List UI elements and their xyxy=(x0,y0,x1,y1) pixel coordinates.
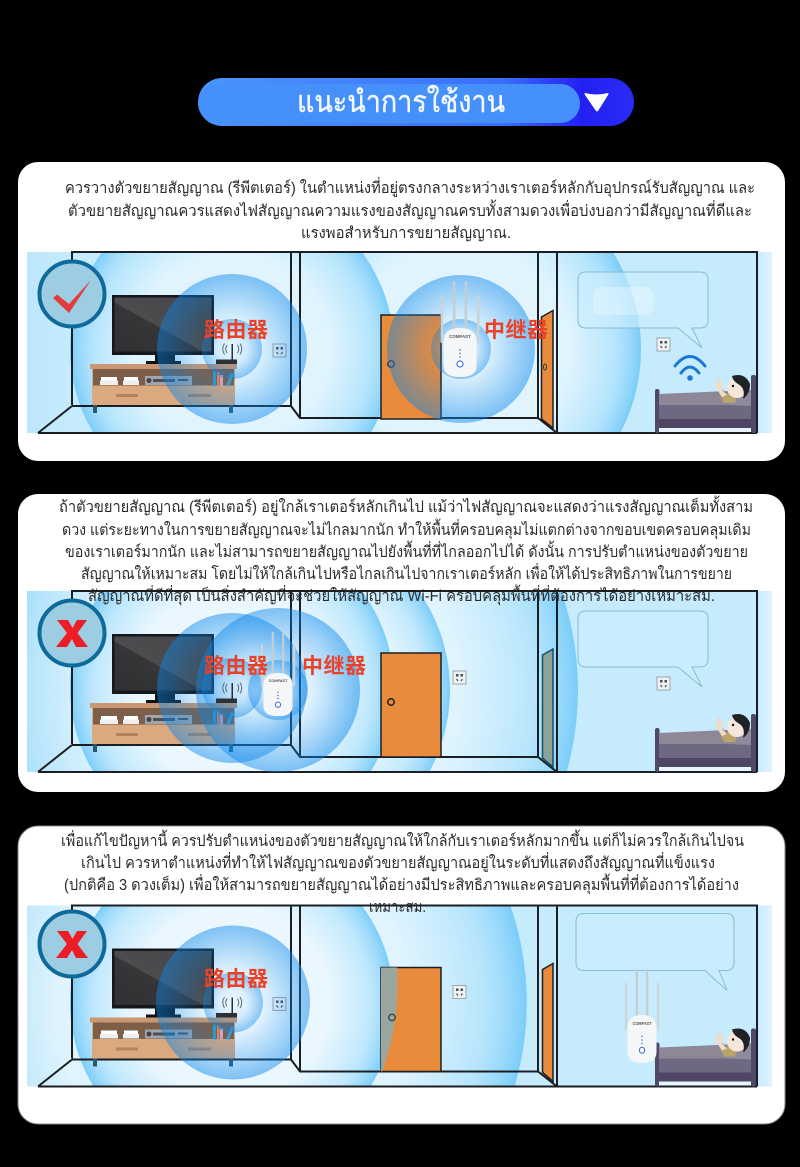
panel: too close to router xyxy=(18,494,785,792)
instruction text xyxy=(59,495,753,606)
router and repeater signal circles xyxy=(157,608,360,772)
label: router: 路由器 xyxy=(204,968,268,991)
instruction text: แรงพอสำหรับการขยายสัญญาณ. xyxy=(301,225,511,242)
icon: wifi xyxy=(675,356,705,381)
repeater device xyxy=(440,281,480,377)
icon: router device xyxy=(216,682,242,703)
instruction text xyxy=(61,829,744,916)
scene background and coverage xyxy=(27,591,772,772)
instruction text: เหมาะสม. xyxy=(369,899,426,916)
icon: router device xyxy=(216,344,242,364)
badge: cross xyxy=(40,912,104,976)
instruction text: (ปกติคือ 3 ดวงเต็ม) เพื่อให้สามารถขยายสัญญาณได้อย่างมีประสิทธิภาพและครอบคลุมพื้นที่ที่ต้องการได้อย่าง xyxy=(64,873,739,895)
label: router: 路由器 xyxy=(204,319,268,342)
icon: router device xyxy=(216,997,242,1018)
instruction text: สัญญาณที่ดีที่สุด เป็นสิ่งสำคัญที่จะช่วยให้สัญญาณ Wi-Fi ครอบคลุมพื้นที่ที่ต้องการได้อย่างเหมาะสม. xyxy=(88,584,715,606)
room scene xyxy=(38,252,757,433)
scene background and coverage xyxy=(27,906,772,1086)
room scene xyxy=(38,906,757,1086)
instruction text: ถ้าตัวขยายสัญญาณ (รีพีตเตอร์) อยู่ใกล้เราเตอร์หลักเกินไป แม้ว่าไฟสัญญาณจะแสดงว่าแรงสัญญาณเต็มทั้งสาม xyxy=(59,495,753,517)
instruction text: ตัวขยายสัญญาณควรแสดงไฟสัญญาณความแรงของสัญญาณครบทั้งสามดวงเพื่อบ่งบอกว่ามีสัญญาณที่ดีและ xyxy=(68,199,752,220)
instruction text: ดวง แต่ระยะทางในการขยายสัญญาณจะไม่ไกลมากนัก ทำให้พื้นที่ครอบคลุมไม่แตกต่างจากขอบเขตครอบคลุมเดิม xyxy=(62,518,751,540)
repeater device xyxy=(261,632,295,716)
instruction text: ควรวางตัวขยายสัญญาณ (รีพีตเตอร์) ในตำแหน่งที่อยู่ตรงกลางระหว่างเราเตอร์หลักกับอุปกรณ์รับสัญญาณ และ xyxy=(65,177,755,198)
label: router: 路由器 xyxy=(204,655,268,678)
icon: down arrow xyxy=(584,93,608,112)
instruction text xyxy=(65,177,755,242)
title banner xyxy=(198,78,634,126)
instruction text: เกินไป ควรหาตำแหน่งที่ทำให้ไฟสัญญาณของตัวขยายสัญญาณอยู่ในระดับที่แสดงถึงสัญญาณที่แข็งแรง xyxy=(81,852,715,873)
panel: correct placement xyxy=(18,162,785,461)
badge: check xyxy=(40,262,104,326)
badge: cross xyxy=(40,600,104,666)
instruction text: สัญญาณให้เหมาะสม โดยไม่ให้ใกล้เกินไปหรือไกลเกินไปจากเราเตอร์หลัก เพื่อให้ได้ประสิทธิภาพในการขยาย xyxy=(81,563,732,583)
instruction text: เพื่อแก้ไขปัญหานี้ ควรปรับตำแหน่งของตัวขยายสัญญาณให้ใกล้กับเราเตอร์หลักมากขึ้น แต่ก็ไม่ควรใกล้เกินไปจน xyxy=(61,829,744,850)
repeater signal circles xyxy=(387,275,535,423)
label: repeater: 中继器 xyxy=(484,318,548,342)
panel: too far from router xyxy=(18,826,786,1124)
title: แนะนำการใช้งาน xyxy=(297,85,505,119)
instruction text: ของเราเตอร์มากนัก และไม่สามารถขยายสัญญาณไปยังพื้นที่ที่ไกลออกไปได้ ดังนั้น การปรับตำแหน่งของตัวขยาย xyxy=(65,540,748,561)
scene background and coverage xyxy=(27,252,772,433)
router signal circles xyxy=(156,926,310,1080)
repeater device xyxy=(625,969,659,1063)
room scene xyxy=(38,591,757,772)
router signal circles xyxy=(157,274,307,424)
label: repeater: 中继器 xyxy=(302,654,366,678)
